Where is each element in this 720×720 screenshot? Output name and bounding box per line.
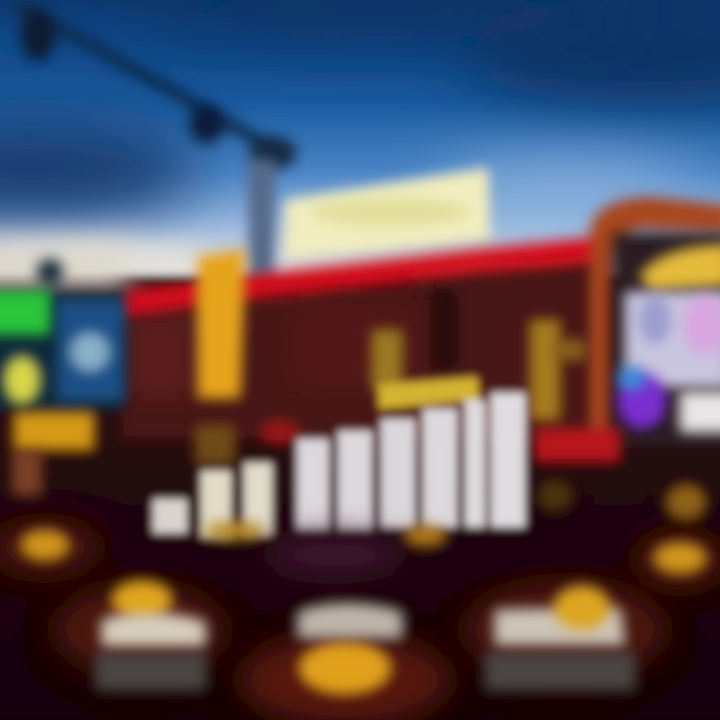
white bar chart shape: [152, 376, 526, 538]
right arch and screen: [590, 196, 720, 447]
small lamps on the right: [537, 479, 720, 584]
glow under bars: [205, 521, 447, 575]
casino building facade: [120, 250, 610, 440]
sky background: [0, 0, 720, 300]
street lamp and wire: [15, 5, 297, 280]
yellow vertical sign: [197, 248, 245, 398]
left table lamp: [0, 522, 100, 574]
table: right: [465, 582, 665, 690]
red lights at building foot: [260, 420, 620, 462]
table: centre: [240, 604, 450, 720]
gold ornaments on facade: [195, 320, 585, 465]
left skyline haze: [0, 245, 130, 290]
table: left: [55, 581, 225, 690]
street and building base: [0, 275, 720, 720]
red roof strip: [120, 235, 605, 316]
left neon signs: [0, 258, 125, 495]
pale billboard: [285, 168, 490, 258]
